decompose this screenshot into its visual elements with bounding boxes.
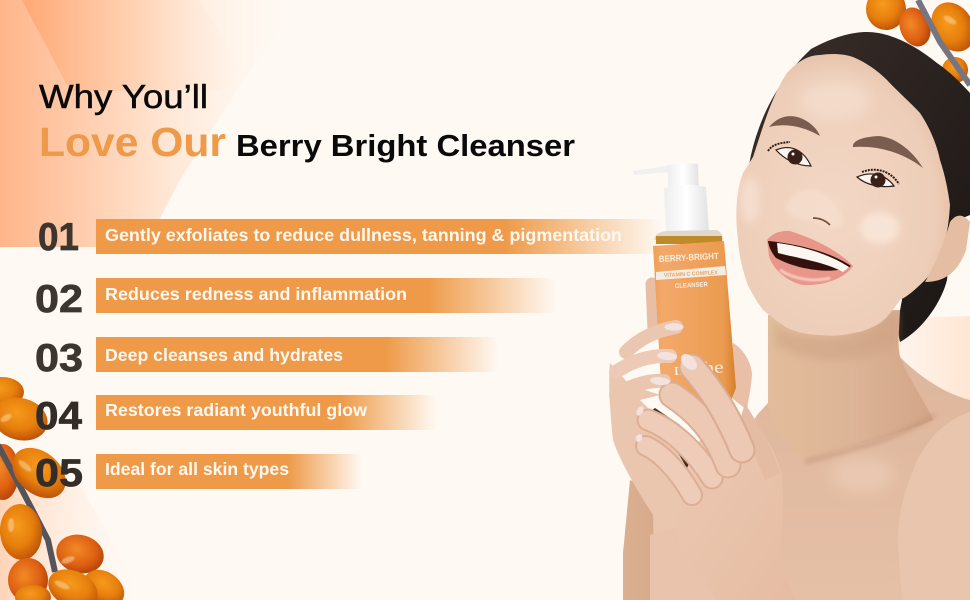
woman: chest shading — [830, 457, 894, 493]
benefit 4 text: Restores radiant youthful glow — [105, 400, 367, 420]
bottle glass neck — [654, 230, 723, 242]
nails — [634, 323, 700, 443]
woman: under chin shadow — [775, 310, 898, 360]
label band — [656, 266, 726, 280]
number 04: 04 — [35, 395, 82, 438]
number 02: 02 — [35, 278, 83, 321]
bar 5 — [96, 454, 362, 489]
number 05: 05 — [35, 452, 83, 495]
mouth — [768, 241, 851, 271]
lip highlight — [780, 270, 830, 280]
woman: hair and bun — [749, 32, 970, 342]
benefit 5 text: Ideal for all skin types — [105, 459, 289, 479]
front finger long — [672, 395, 728, 465]
lips — [767, 231, 853, 285]
benefit 2 text: Reduces redness and inflammation — [105, 284, 407, 304]
number 01: 01 — [38, 216, 79, 259]
background shape: lower left facet — [0, 470, 145, 600]
index finger over bottle — [692, 367, 742, 450]
right eye — [857, 170, 899, 188]
woman: neck — [768, 310, 933, 460]
cleanser liquid — [656, 236, 722, 244]
cheek highlight — [860, 212, 900, 244]
pump nozzle — [633, 165, 672, 175]
heading: berry bright cleanser: Berry Bright Cleanser — [236, 128, 575, 163]
bar 2 — [96, 278, 556, 313]
bottle body — [653, 241, 736, 423]
background shape: darker top left facet — [22, 0, 240, 91]
top right berries — [866, 0, 970, 85]
product name: BERRY-BRIGHT — [659, 251, 719, 264]
heading: love our: Love Our — [39, 119, 226, 165]
cleanser label: CLEANSER — [675, 281, 708, 290]
woman: hands — [609, 323, 797, 600]
woman: left thumb behind bottle — [652, 284, 654, 330]
bar 1 — [96, 219, 662, 254]
woman: collarbone shadow — [805, 415, 935, 462]
woman: upper arm left — [623, 480, 700, 600]
benefit 1 text: Gently exfoliates to reduce dullness, tanning & pigmentation — [105, 225, 622, 245]
back wrist — [650, 520, 716, 600]
right eyebrow — [853, 136, 923, 168]
benefit 3 text: Deep cleanses and hydrates — [105, 345, 343, 365]
ear — [925, 216, 970, 282]
woman: finger behind bottle right — [728, 343, 752, 410]
band label: VITAMIN C COMPLEX — [664, 270, 718, 279]
nose — [785, 189, 842, 227]
background shape: right peach panel — [880, 316, 970, 430]
woman: right shoulder light — [898, 412, 970, 600]
woman: shoulder, chest and right arm — [700, 325, 970, 600]
brand name: nushe — [673, 357, 724, 379]
woman: face — [736, 54, 970, 336]
bottom left berries — [0, 377, 131, 600]
front hand back — [672, 415, 797, 600]
front finger ring — [646, 446, 692, 495]
pump collar — [664, 185, 709, 234]
third finger — [616, 381, 664, 395]
heading: why you'll: Why You’ll — [39, 78, 208, 115]
back hand palm — [609, 363, 716, 600]
forehead highlight — [799, 80, 871, 120]
nostrils — [813, 218, 830, 225]
pump head — [668, 163, 699, 192]
front finger middle — [648, 420, 712, 478]
top finger — [626, 327, 676, 352]
background shape: large top left hexagon — [0, 0, 300, 247]
product bottle — [633, 163, 736, 423]
left eye — [768, 142, 811, 166]
number 03: 03 — [35, 337, 83, 380]
bar 4 — [96, 395, 436, 430]
bar 3 — [96, 337, 498, 372]
left eyebrow — [769, 116, 820, 136]
left cheek highlight — [740, 176, 760, 224]
finger gap shadow — [640, 408, 700, 472]
second finger — [616, 356, 670, 372]
teeth — [777, 243, 849, 272]
front right little finger — [740, 403, 780, 480]
